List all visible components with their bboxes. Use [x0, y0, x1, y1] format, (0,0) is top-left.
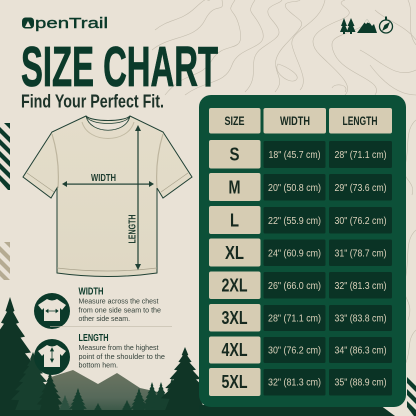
row 2XL: 26" (66.0 cm) [268, 281, 321, 292]
row XL: XL [225, 243, 244, 263]
row 4XL: 34" (86.3 cm) [334, 346, 386, 356]
decorative stripes: tan [0, 242, 10, 280]
length label: LENGTH [128, 214, 138, 244]
icon: mountain [357, 19, 377, 33]
width label: WIDTH [91, 173, 116, 184]
icon: width shirt [34, 293, 70, 329]
row 2XL [209, 272, 392, 299]
row 5XL [209, 368, 392, 396]
title: SIZE CHART [21, 35, 218, 99]
header labels: LENGTH [342, 116, 378, 128]
row 3XL: 33" (83.8 cm) [334, 314, 386, 324]
row 5XL: 32" (81.3 cm) [268, 378, 321, 388]
length heading: LENGTH [78, 332, 108, 344]
row XL: 24" (60.9 cm) [268, 248, 321, 260]
top right icons [340, 16, 392, 34]
row 2XL: 32" (81.3 cm) [334, 281, 386, 292]
forest [0, 297, 209, 416]
icon: length shirt [34, 339, 70, 375]
header labels: SIZE [224, 116, 245, 128]
width description [78, 298, 161, 323]
row M: 20" (50.8 cm) [268, 183, 321, 194]
row XL [209, 238, 392, 266]
subtitle: Find Your Perfect Fit. [21, 92, 164, 112]
decorative stripes: bottom right [407, 377, 416, 416]
length description: point of the shoulder to the [78, 354, 165, 361]
length arrow [135, 125, 141, 270]
decorative stripes: dark [0, 123, 10, 190]
row S: 18" (45.7 cm) [268, 150, 320, 161]
row 5XL: 5XL [222, 372, 248, 392]
row 3XL: 28" (71.1 cm) [268, 314, 321, 324]
row S: 28" (71.1 cm) [334, 150, 386, 161]
row 4XL: 4XL [222, 340, 248, 360]
forest under panel [199, 405, 395, 416]
row M: 29" (73.6 cm) [334, 183, 386, 194]
row S [209, 140, 392, 168]
mountains [48, 370, 178, 416]
row M [209, 173, 392, 201]
row S: S [230, 144, 240, 164]
row 3XL: 3XL [222, 308, 248, 328]
width description: from one side seam to the [78, 308, 161, 314]
row XL: 31" (78.7 cm) [334, 248, 386, 260]
row M: M [228, 178, 240, 198]
panel: size table [199, 95, 406, 407]
row L [209, 206, 392, 234]
header labels [224, 116, 378, 128]
length description [78, 345, 165, 370]
t-shirt diagram [23, 116, 192, 276]
width description: Measure across the chest [78, 298, 159, 306]
header labels: WIDTH [280, 116, 310, 128]
row L: L [230, 210, 239, 230]
row 2XL: 2XL [222, 276, 248, 296]
icon: logo mark [22, 18, 34, 28]
table header [209, 108, 392, 134]
length description: Measure from the highest [78, 345, 159, 352]
logo [22, 15, 108, 32]
row L: 30" (76.2 cm) [334, 216, 386, 227]
row 3XL [209, 304, 392, 332]
row 5XL: 35" (88.9 cm) [334, 378, 386, 388]
logo wordmark: penTrail [35, 15, 108, 32]
shirt outline [23, 116, 192, 276]
length description: bottom hem. [78, 362, 118, 370]
icon: trees [340, 18, 356, 34]
width description: other side seam. [78, 316, 130, 323]
measure: width [34, 286, 161, 329]
icon: compass [380, 16, 392, 33]
row L: 22" (55.9 cm) [268, 216, 321, 227]
measure: length [34, 332, 165, 375]
width heading: WIDTH [78, 286, 104, 298]
row 4XL: 30" (76.2 cm) [268, 346, 321, 356]
width arrow [62, 181, 154, 187]
row 4XL [209, 336, 392, 364]
